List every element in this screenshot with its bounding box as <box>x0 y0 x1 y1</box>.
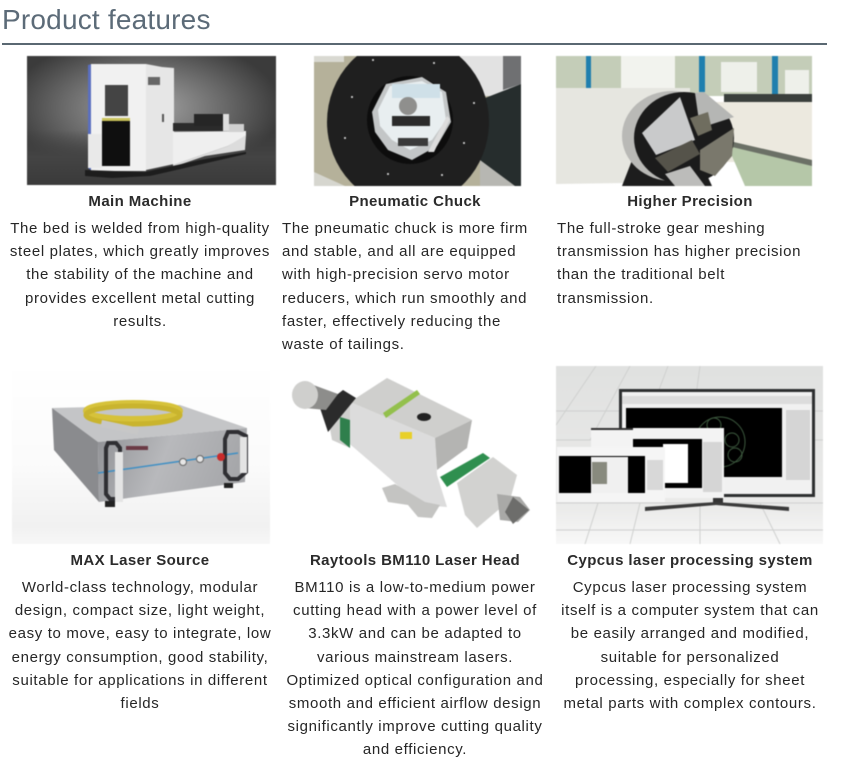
text block: The full-stroke gear meshing <box>557 220 765 237</box>
text block: and stable, and all are equipped <box>282 243 516 260</box>
text block: cutting head with a power level of <box>293 602 537 619</box>
text block: fields <box>121 695 159 712</box>
text block: Cypcus laser processing system <box>573 579 807 596</box>
text block: suitable for personalized <box>601 649 779 666</box>
heading: Higher Precision <box>627 193 753 210</box>
text block: World-class technology, modular <box>22 579 258 596</box>
text block: with high-precision servo motor <box>282 266 510 283</box>
text block: and efficiency. <box>363 741 467 758</box>
text block: than the traditional belt <box>557 266 725 283</box>
text block <box>557 220 801 307</box>
text block: The pneumatic chuck is more firm <box>282 220 528 237</box>
heading: Raytools BM110 Laser Head <box>310 552 520 569</box>
image: laser head <box>292 378 530 528</box>
panel: main machine <box>10 55 277 330</box>
panel: max laser source <box>9 399 271 712</box>
image: pneumatic chuck <box>314 55 522 187</box>
image: chuck closeup <box>556 55 813 187</box>
text block: easy to move, easy to integrate, low <box>9 625 271 642</box>
text block: BM110 is a low-to-medium power <box>294 579 535 596</box>
text block <box>561 579 819 712</box>
title: Product features <box>2 4 211 35</box>
text block: significantly improve cutting quality <box>288 718 542 735</box>
text block: metal parts with complex contours. <box>563 695 817 712</box>
image: laser source <box>12 399 270 543</box>
text block: The bed is welded from high-quality <box>10 220 270 237</box>
text block: itself is a computer system that can <box>561 602 819 619</box>
image: main machine <box>26 55 277 186</box>
text block: waste of tailings. <box>282 336 405 353</box>
text block: transmission. <box>557 290 654 307</box>
text block: transmission has higher precision <box>557 243 801 260</box>
text block <box>10 220 270 330</box>
text block: design, compact size, light weight, <box>15 602 265 619</box>
text block <box>9 579 271 712</box>
text block: the stability of the machine and <box>26 266 254 283</box>
text block: results. <box>113 313 167 330</box>
text block: smooth and efficient airflow design <box>289 695 541 712</box>
text block: energy consumption, good stability, <box>12 649 268 666</box>
text block: suitable for applications in different <box>12 672 268 689</box>
text block: 3.3kW and can be adapted to <box>308 625 522 642</box>
text block: be easily arranged and modified, <box>571 625 809 642</box>
heading: Pneumatic Chuck <box>349 193 481 210</box>
text block: processing, especially for sheet <box>575 672 805 689</box>
text block: reducers, which run smoothly and <box>282 290 527 307</box>
heading: Main Machine <box>88 193 192 210</box>
heading: Cypcus laser processing system <box>567 552 813 569</box>
panel: cypcus system <box>556 366 824 712</box>
text block <box>286 579 544 758</box>
heading: MAX Laser Source <box>71 552 209 569</box>
text block: various mainstream lasers. <box>317 649 513 666</box>
panel: raytools laser head <box>286 378 544 758</box>
panel: pneumatic chuck <box>282 55 528 353</box>
text block <box>282 220 528 353</box>
panel: higher precision <box>556 55 813 307</box>
image: software monitor <box>556 366 824 544</box>
text block: steel plates, which greatly improves <box>10 243 270 260</box>
text block: faster, effectively reducing the <box>282 313 501 330</box>
text block: Optimized optical configuration and <box>286 672 544 689</box>
text block: provides excellent metal cutting <box>25 290 255 307</box>
